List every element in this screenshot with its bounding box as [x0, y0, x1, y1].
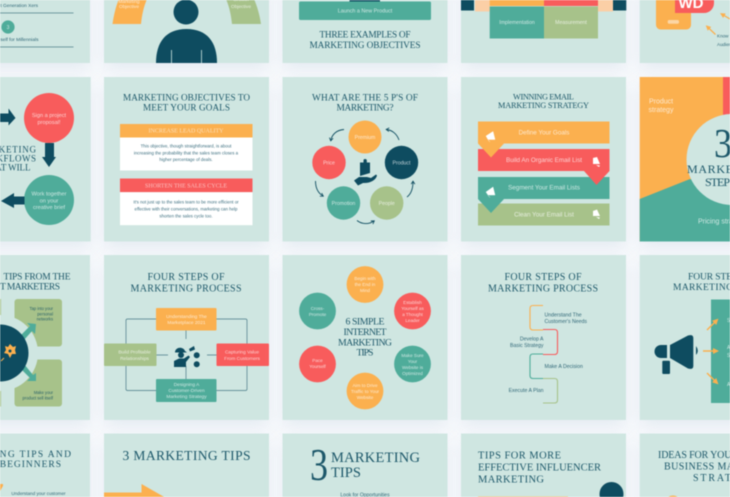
panel: winning email marketing strategy [461, 77, 626, 242]
text: objective labels [118, 0, 251, 10]
tip: thought leader: Leader [405, 318, 420, 323]
box: understanding: Understanding The [166, 314, 207, 320]
tip: drive traffic: Website [357, 395, 374, 400]
arrow: down [42, 143, 56, 167]
tip: website optimized: Optimized [402, 371, 423, 376]
arrows: teal [20, 323, 36, 381]
title [478, 450, 601, 486]
tip: begin with the end: Mind [360, 288, 370, 293]
tip: pace yourself: Pace [312, 358, 323, 363]
node: product: Product [393, 160, 411, 166]
card: shorten the sales cycle [120, 178, 252, 225]
box: capturing value: Capturing Value [225, 350, 259, 356]
step: clean your email list: Clean Your Email List [514, 212, 574, 218]
box: designing strategy: Designing A [174, 382, 200, 388]
tile: left [0, 299, 1, 406]
panel: ideas for your business marketing strategy [640, 434, 730, 497]
cell: implementation: Implementation [499, 20, 535, 26]
node: promotion: Promotion [332, 201, 355, 207]
tip: cross-promote [299, 293, 336, 329]
box: designing strategy: Customer-Driven [168, 388, 205, 394]
title [687, 162, 730, 189]
title: MARKETING OBJECTIVES [310, 41, 420, 51]
brackets [530, 306, 558, 403]
node: work together: creative brief [33, 205, 65, 211]
box: build relationships: Build Profitable [118, 350, 151, 356]
cell: measurement: Measurement [555, 20, 587, 26]
arc: green objective [226, 0, 261, 24]
step: define your goals [478, 122, 610, 158]
card: increase lead quality: This objective, though straightforward, is about [141, 144, 232, 148]
title: INTERNET [344, 327, 387, 338]
panel: implementation grid [461, 0, 626, 63]
text: product strategy: strategy [649, 107, 674, 114]
step: build an organic email list: Build An Organic Email List [506, 157, 582, 164]
title: 3 MARKETING TIPS [122, 448, 250, 463]
card: increase lead quality: INCREASE LEAD QUALITY [148, 129, 224, 135]
node: work together: on your [40, 198, 58, 204]
labels: Understand The [544, 312, 582, 318]
tip: thought leader [394, 293, 431, 329]
tip: drive traffic: Aim to Drive [352, 383, 378, 388]
arrow: orange [104, 484, 166, 497]
box: designing strategy: Marketing Strategy [166, 394, 207, 400]
tile: personal networks: networks [37, 316, 53, 322]
card: shorten the sales cycle: SHORTEN THE SALES CYCLE [145, 184, 227, 190]
card: shorten the sales cycle: effective with their conversations, marketing can help [135, 206, 238, 212]
panel: marketing objectives to meet your goals [104, 77, 269, 242]
labels: Make A Decision [544, 364, 583, 370]
title: MARKETING [331, 450, 421, 466]
numeral 3: 3 [310, 440, 328, 490]
title: MARKETING STRATEGY [498, 101, 589, 110]
box: designing strategy [156, 379, 216, 402]
button: launch a new product: Launch a New Product [338, 8, 393, 14]
title [338, 316, 392, 358]
node: promotion [327, 186, 360, 220]
text: know your audience [717, 34, 730, 47]
box: build relationships: Relationships [120, 356, 149, 362]
tip: website optimized [394, 346, 431, 382]
panel: marketing tips for beginners [0, 434, 90, 497]
title: MARKETING OBJECTIVES TO [123, 92, 250, 102]
title [498, 92, 589, 110]
cell: implementation [490, 6, 544, 38]
box: capturing value: From Customers [224, 356, 260, 362]
node: premium [348, 120, 382, 154]
labels: Execute A Plan [509, 388, 544, 394]
arrows: orange [703, 320, 717, 383]
tip: cross-promote: Promote [309, 312, 327, 317]
title: TIPS FOR MORE [478, 450, 561, 462]
title [0, 272, 71, 292]
tip: website optimized: Your [408, 359, 418, 364]
panel: four steps of marketing process, cycle [104, 255, 269, 420]
title [312, 94, 418, 114]
title [0, 450, 71, 470]
wedge: green [640, 179, 730, 242]
title: EFFECTIVE INFLUENCER [478, 462, 601, 474]
tip: thought leader: Yourself as [401, 306, 424, 311]
panel: 3 marketing tips large [282, 434, 448, 497]
card: increase lead quality: higher percentage of deals. [159, 157, 213, 162]
icon: orange arrow [0, 484, 3, 491]
title [310, 30, 420, 51]
title: FOUR STEPS OF [148, 272, 225, 283]
title: WHAT ARE THE 5 P'S OF [312, 94, 418, 104]
title [130, 272, 242, 294]
panel: 6 simple internet marketing tips [282, 255, 448, 420]
labels: Develop A [520, 336, 544, 342]
bar: orange [478, 496, 568, 497]
labels: Basic Strategy [510, 343, 544, 349]
arrow: left [1, 193, 24, 208]
node: price [312, 146, 346, 179]
arrow: right [0, 108, 16, 126]
arc: orange objective [112, 0, 147, 24]
labels [509, 312, 587, 394]
text: product strategy: Product [649, 98, 673, 106]
card: increase lead quality: increasing the probability that the sales team closes a [134, 150, 239, 156]
panel: know your audience [640, 0, 730, 63]
icon: hand holding clipboard [354, 159, 377, 186]
panel: generation list [0, 0, 90, 63]
text: sell for millennials: self for Millennials [0, 37, 39, 43]
tip: pace yourself [299, 346, 336, 382]
box: steps [711, 300, 730, 403]
icon: phone [656, 0, 691, 30]
tip: begin with the end: the End in [355, 282, 376, 287]
title [123, 92, 250, 112]
card: shorten the sales cycle: It's not just up to the sales team to be more efficient or [133, 200, 239, 204]
title [331, 450, 421, 481]
tip: begin with the end [347, 266, 383, 303]
node: sign a project proposal: Sign a project [32, 113, 67, 119]
tip: thought leader: Establish [403, 300, 422, 305]
title: MARKETING PROCESS [488, 284, 598, 294]
tile: sell itself: product sell itself [22, 396, 54, 400]
text: objective labels: Objective [119, 4, 139, 10]
text: generation xers: t Generation Xers [0, 3, 39, 9]
panel: four steps with megaphone [640, 255, 730, 420]
text: objective labels: Marketing [118, 0, 140, 5]
title: STEP [705, 175, 730, 189]
node: work together [24, 175, 74, 225]
title: FOUR STEPS OF [504, 272, 582, 283]
circle: center [686, 114, 730, 205]
text: product strategy [649, 98, 674, 114]
panel: four steps of marketing process, bracket timeline [461, 255, 626, 420]
title: THREE EXAMPLES OF [320, 30, 410, 40]
tile: sell itself: Make your [34, 390, 54, 395]
tile: personal networks [14, 299, 62, 346]
node: sign a project proposal [24, 93, 74, 143]
title: MEET YOUR GOALS [143, 102, 230, 112]
tile: sell itself [14, 360, 62, 406]
tip: begin with the end: Begin with [354, 276, 376, 281]
title: STRAT [693, 473, 730, 484]
wedge: red [723, 77, 730, 122]
tip: drive traffic: Traffic to Your [351, 389, 380, 394]
title [658, 450, 730, 484]
box: build relationships [104, 344, 156, 366]
box: understanding [156, 308, 216, 330]
node: product [385, 146, 418, 179]
title: MARKETING [338, 338, 392, 348]
tip: website optimized: Website is [402, 365, 424, 370]
card: shorten the sales cycle: shorten the sales cycle too. [159, 214, 213, 218]
step: define your goals: Define Your Goals [519, 130, 569, 136]
card: increase lead quality [120, 124, 252, 170]
title [488, 272, 598, 294]
panel: effective influencer marketing [461, 434, 626, 497]
panel: marketing workflows [0, 77, 91, 242]
step badge 3: 3 [7, 25, 10, 31]
title: TIPS [356, 348, 374, 358]
title: WINNING EMAIL [513, 92, 574, 102]
title [673, 272, 730, 293]
title: TIPS FROM THE [4, 272, 71, 282]
text: objective labels: Objective [231, 4, 251, 10]
circle: orange [665, 496, 681, 497]
title: T MARKETERS [0, 282, 60, 292]
step: clean your email list [478, 204, 610, 226]
arrows: cycle [316, 130, 413, 224]
title: MARKETING PROCESS [130, 284, 242, 294]
title: TIPS [331, 465, 361, 481]
title: MARKETING? [336, 104, 394, 114]
tile: personal networks: Tap into your [30, 306, 54, 311]
title [0, 144, 36, 172]
node: people: People [379, 201, 395, 207]
icon: marketer with coins [174, 346, 200, 367]
node: work together: Work together [31, 192, 67, 198]
panel: 5 p's of marketing [282, 77, 448, 242]
box: understanding: Marketplace 2021 [167, 320, 206, 326]
cell: measurement [544, 6, 598, 38]
step: segment your email lists [478, 177, 610, 213]
box: capturing value [216, 344, 269, 366]
panel: 3 marketing tips [104, 434, 269, 497]
text: understand your customer: Understand your customer [11, 491, 66, 496]
tip: cross-promote: Cross- [311, 306, 325, 311]
tile: personal networks: personal [37, 312, 53, 316]
title: 6 SIMPLE [346, 316, 385, 328]
arrows [707, 14, 730, 34]
tip: thought leader: a Thought [402, 312, 424, 317]
panel: 3 marketing steps [640, 77, 730, 242]
button: launch a new product [299, 2, 431, 20]
circle: dark [600, 482, 624, 497]
halo [0, 315, 38, 391]
title: MARKETING [478, 474, 544, 486]
panel: three examples of objectives [282, 0, 448, 63]
icon: person [156, 0, 217, 63]
tip: drive traffic [347, 373, 383, 409]
node: sign a project proposal: proposal! [37, 120, 61, 126]
step: build an organic email list [478, 149, 610, 185]
panel: marketing objectives person [104, 0, 269, 63]
node: premium: Premium [355, 135, 375, 141]
tip: website optimized: Make Sure [401, 353, 424, 358]
node: people [370, 186, 403, 220]
icon: megaphone [655, 335, 698, 374]
circle: hub with flower [0, 324, 28, 382]
panel: tips from the best marketers [0, 255, 90, 420]
step: segment your email lists: Segment Your Email Lists [508, 184, 580, 192]
labels: Customer's Needs [544, 319, 587, 325]
connector lines [126, 319, 247, 390]
tip: pace yourself: Yourself [309, 364, 326, 369]
node: price: Price [323, 160, 335, 166]
